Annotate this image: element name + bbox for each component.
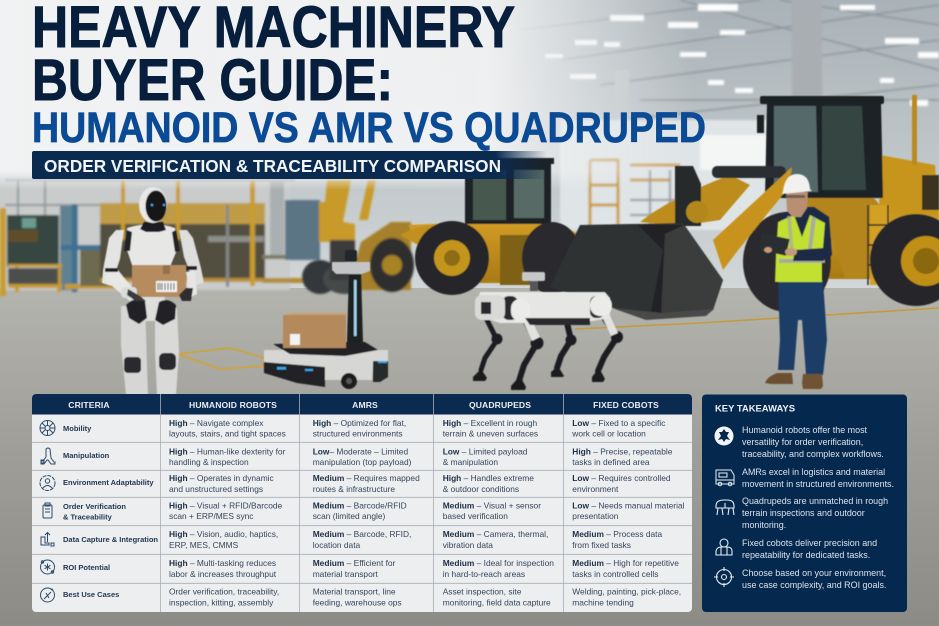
- row: Mobility: Low – Fixed to a specific: [572, 418, 665, 428]
- illustration: humanoid robot with box: [102, 187, 204, 395]
- title: line two: BUYER GUIDE:: [32, 48, 393, 113]
- row: ROI Potential: in hard-to-reach areas: [443, 569, 525, 579]
- row: Mobility: Mobility: [63, 424, 92, 433]
- row: Order Verification: & Traceability: [63, 512, 113, 522]
- subtitle banner: ORDER VERIFICATION & TRACEABILITY COMPARISON: [44, 156, 501, 176]
- icon: data capture: [41, 532, 54, 546]
- heading: key takeaways: KEY TAKEAWAYS: [715, 404, 795, 414]
- row: Best Use Cases: Asset inspection, site: [443, 586, 522, 596]
- row: Environment Adaptability: Medium – Requires mapped: [313, 473, 420, 483]
- takeaway: fixed cobots: Fixed cobots deliver precision and: [742, 538, 877, 548]
- icon: clipboard: [43, 503, 52, 518]
- subtitle banner: [32, 151, 547, 179]
- takeaway: quadrupeds: Quadrupeds are unmatched in rough: [742, 496, 888, 506]
- row: Order Verification: High – Visual + RFID/Barcode: [169, 500, 283, 510]
- takeaway: fixed cobots: [716, 538, 877, 560]
- row: Best Use Cases: Best Use Cases: [63, 590, 119, 599]
- row: Order Verification: based verification: [443, 511, 508, 521]
- row: Best Use Cases: Order verification, traceability,: [169, 586, 279, 596]
- row: Data Capture and Integration: location data: [313, 540, 361, 550]
- illustration: quadruped robot: [473, 272, 623, 390]
- row: Environment Adaptability: High – Handles extreme: [443, 473, 534, 483]
- takeaway: choose: Choose based on your environment,: [742, 568, 886, 578]
- row: Mobility: High – Navigate complex: [169, 418, 264, 428]
- row: ROI Potential: ROI Potential: [63, 563, 110, 572]
- row: Manipulation: tasks in defined area: [572, 457, 650, 467]
- row: Order Verification: Order Verification: [63, 502, 126, 511]
- row: Order Verification: [43, 500, 685, 522]
- row: Manipulation: Low– Moderate – Limited: [313, 446, 408, 456]
- row: Mobility: High – Excellent in rough: [443, 418, 538, 428]
- row: Data Capture and Integration: Medium – Camera, thermal,: [443, 529, 548, 539]
- takeaway: humanoid: Humanoid robots offer the most: [742, 425, 868, 435]
- row: Environment Adaptability: Environment Adaptability: [63, 478, 154, 487]
- row: Best Use Cases: machine tending: [572, 598, 634, 608]
- row: Manipulation: & manipulation: [443, 457, 498, 467]
- comparison table: [32, 394, 692, 612]
- row: ROI Potential: labor & increases throughput: [169, 569, 277, 579]
- table header row: AMRS: [352, 400, 378, 410]
- icon: best use: [40, 588, 54, 602]
- table header row: [32, 394, 692, 414]
- row: Data Capture and Integration: [41, 529, 662, 550]
- row: Data Capture and Integration: from fixed tasks: [572, 540, 631, 550]
- title: line three: HUMANOID VS AMR VS QUADRUPED: [32, 104, 706, 152]
- row: Manipulation: [41, 446, 673, 467]
- illustration: floor marking lines: [177, 308, 939, 369]
- icon: manipulation: [41, 448, 55, 464]
- row: Environment Adaptability: and unstructured settings: [169, 484, 263, 494]
- row: Best Use Cases: Material transport, line: [313, 586, 396, 596]
- panel: key takeaways: [702, 394, 907, 612]
- row: Environment Adaptability: Low – Requires controlled: [572, 473, 671, 483]
- row: Mobility: layouts, stairs, and tight spaces: [169, 429, 286, 439]
- takeaway: AMR: movement in structured environments.: [742, 479, 894, 489]
- row: Best Use Cases: Welding, painting, pick-place,: [572, 586, 681, 596]
- row: ROI Potential: Medium – Ideal for inspection: [443, 558, 554, 568]
- table header row: CRITERIA: [68, 400, 110, 410]
- row: Manipulation: manipulation (top payload): [313, 457, 412, 467]
- takeaway: quadrupeds: monitoring.: [742, 520, 786, 530]
- row: Data Capture and Integration: High – Vision, audio, haptics,: [169, 529, 278, 539]
- row: Order Verification: Low – Needs manual material: [572, 500, 685, 510]
- row: Manipulation: High – Precise, repeatable: [572, 446, 673, 456]
- row: Order Verification: Medium – Barcode/RFID: [313, 500, 407, 510]
- takeaway: humanoid: [714, 425, 884, 459]
- row: Data Capture and Integration: ERP, MES, CMMS: [169, 540, 239, 550]
- row: ROI Potential: Medium – Efficient for: [313, 558, 396, 568]
- table body background: [32, 394, 692, 612]
- row: ROI Potential: tasks in controlled cells: [572, 569, 658, 579]
- row: Mobility: High – Optimized for flat,: [313, 418, 406, 428]
- icon: environment: [40, 476, 55, 490]
- row: Data Capture and Integration: Data Capture & Integration: [63, 535, 158, 544]
- table header row: HUMANOID ROBOTS: [189, 400, 277, 410]
- row: Order Verification: scan + ERP/MES sync: [169, 511, 253, 521]
- takeaway: AMR: AMRs excel in logistics and material: [742, 467, 885, 477]
- row: ROI Potential: material transport: [313, 569, 379, 579]
- row: Manipulation: High – Human-like dexterity for: [169, 446, 286, 456]
- takeaway: humanoid: versatility for order verification,: [742, 437, 863, 447]
- illustration: centre wheel loader: [400, 158, 594, 295]
- row: Data Capture and Integration: vibration data: [443, 540, 493, 550]
- icon: mobility: [40, 420, 55, 436]
- row: Data Capture and Integration: Medium – Barcode, RFID,: [313, 529, 411, 539]
- row: Order Verification: Medium – Visual + sensor: [443, 500, 541, 510]
- takeaway: quadrupeds: terrain inspections and outdoor: [742, 508, 865, 518]
- row: Environment Adaptability: & outdoor conditions: [443, 484, 519, 494]
- takeaway: quadrupeds: [716, 496, 888, 530]
- takeaway: choose: use case complexity, and ROI goals.: [742, 580, 886, 590]
- row: Environment Adaptability: [40, 473, 671, 494]
- row: Environment Adaptability: environment: [572, 484, 619, 494]
- takeaway: AMR: [716, 467, 894, 489]
- title block: [32, 0, 706, 179]
- takeaway: fixed cobots: repeatability for dedicated tasks.: [742, 550, 870, 560]
- row: ROI Potential: [40, 558, 679, 579]
- row: ROI Potential: High – Multi-tasking reduces: [169, 558, 276, 568]
- row: Mobility: terrain & uneven surfaces: [443, 429, 538, 439]
- icon: ROI: [40, 560, 54, 574]
- row: Best Use Cases: feeding, warehouse ops: [313, 598, 402, 608]
- row: Order Verification: presentation: [572, 511, 619, 521]
- row: Data Capture and Integration: Medium – Process data: [572, 529, 662, 539]
- takeaway: humanoid: traceability, and complex workflows.: [742, 449, 884, 459]
- table header row: FIXED COBOTS: [593, 400, 659, 410]
- row: Manipulation: handling & inspection: [169, 457, 249, 467]
- row: Mobility: work cell or location: [571, 429, 646, 439]
- row: ROI Potential: Medium – High for repetitive: [572, 558, 679, 568]
- row: Order Verification: scan (limited angle): [313, 511, 386, 521]
- row: Environment Adaptability: High – Operates in dynamic: [169, 473, 274, 483]
- row: Best Use Cases: [40, 586, 681, 608]
- row: Environment Adaptability: routes & infrastructure: [313, 484, 395, 494]
- illustration: large wheel loader: [550, 95, 939, 320]
- table header row: QUADRUPEDS: [469, 400, 531, 410]
- row: Mobility: [40, 418, 665, 439]
- row: Manipulation: Low – Limited payload: [443, 446, 528, 456]
- illustration: AMR robot with box: [264, 250, 388, 389]
- illustration: worker with tablet: [759, 174, 832, 389]
- row: Best Use Cases: inspection, kitting, assembly: [169, 598, 274, 608]
- row: Mobility: structured environments: [313, 429, 403, 439]
- takeaway: choose: [714, 567, 886, 590]
- row: Best Use Cases: monitoring, field data capture: [443, 598, 551, 608]
- row: Manipulation: Manipulation: [63, 451, 110, 460]
